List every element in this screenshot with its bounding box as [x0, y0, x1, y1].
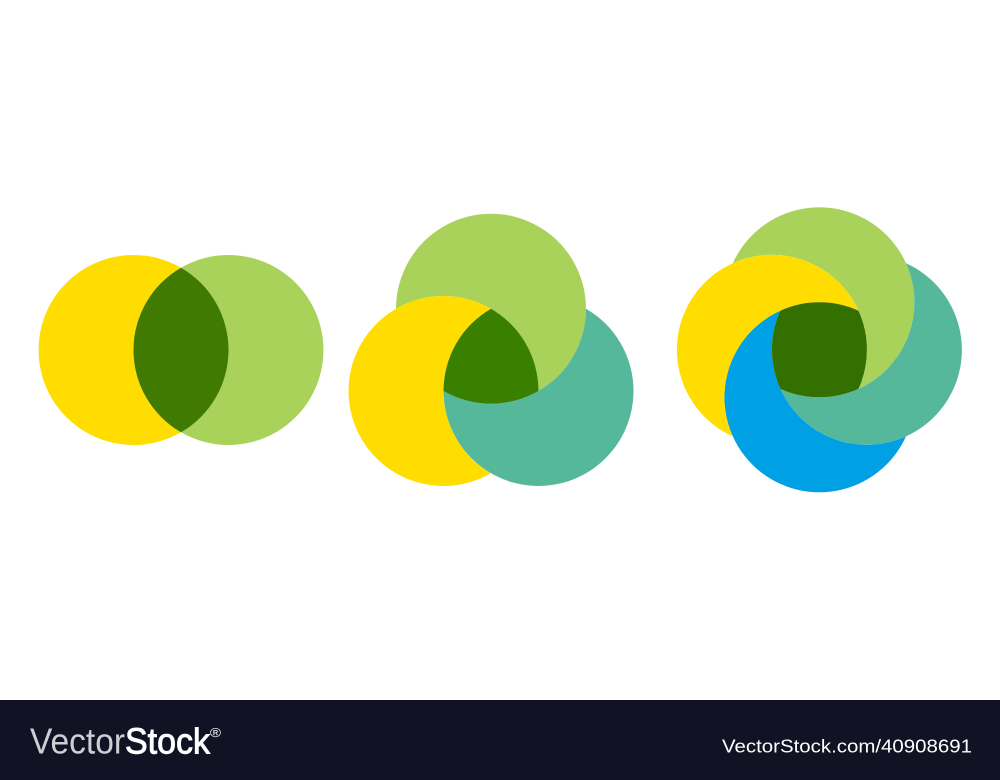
- overlap: dark green lens: [133, 268, 229, 432]
- footer logo: ®: [210, 725, 221, 740]
- circle: yellow: [39, 255, 181, 445]
- circle: light green: [396, 214, 586, 391]
- diagram: three overlapping circles: [349, 214, 634, 486]
- footer logo: Stock: [125, 720, 211, 762]
- footer image id: VectorStock.com/40908691: [722, 736, 972, 757]
- footer logo: [30, 720, 221, 762]
- circle: yellow: [677, 255, 858, 436]
- overlap: dark green centre: [772, 302, 867, 397]
- circle: light green: [733, 207, 914, 389]
- diagram: two overlapping circles: [39, 255, 323, 445]
- footer logo: Vector: [30, 720, 125, 762]
- diagram: four overlapping circles: [677, 207, 962, 492]
- footer bar: [0, 700, 1000, 780]
- circle: blue: [724, 311, 906, 492]
- circle: light green: [181, 255, 323, 445]
- overlap: dark green centre: [444, 309, 538, 404]
- circle: teal: [444, 309, 634, 486]
- circle: yellow: [349, 296, 491, 486]
- circle: teal: [780, 263, 962, 445]
